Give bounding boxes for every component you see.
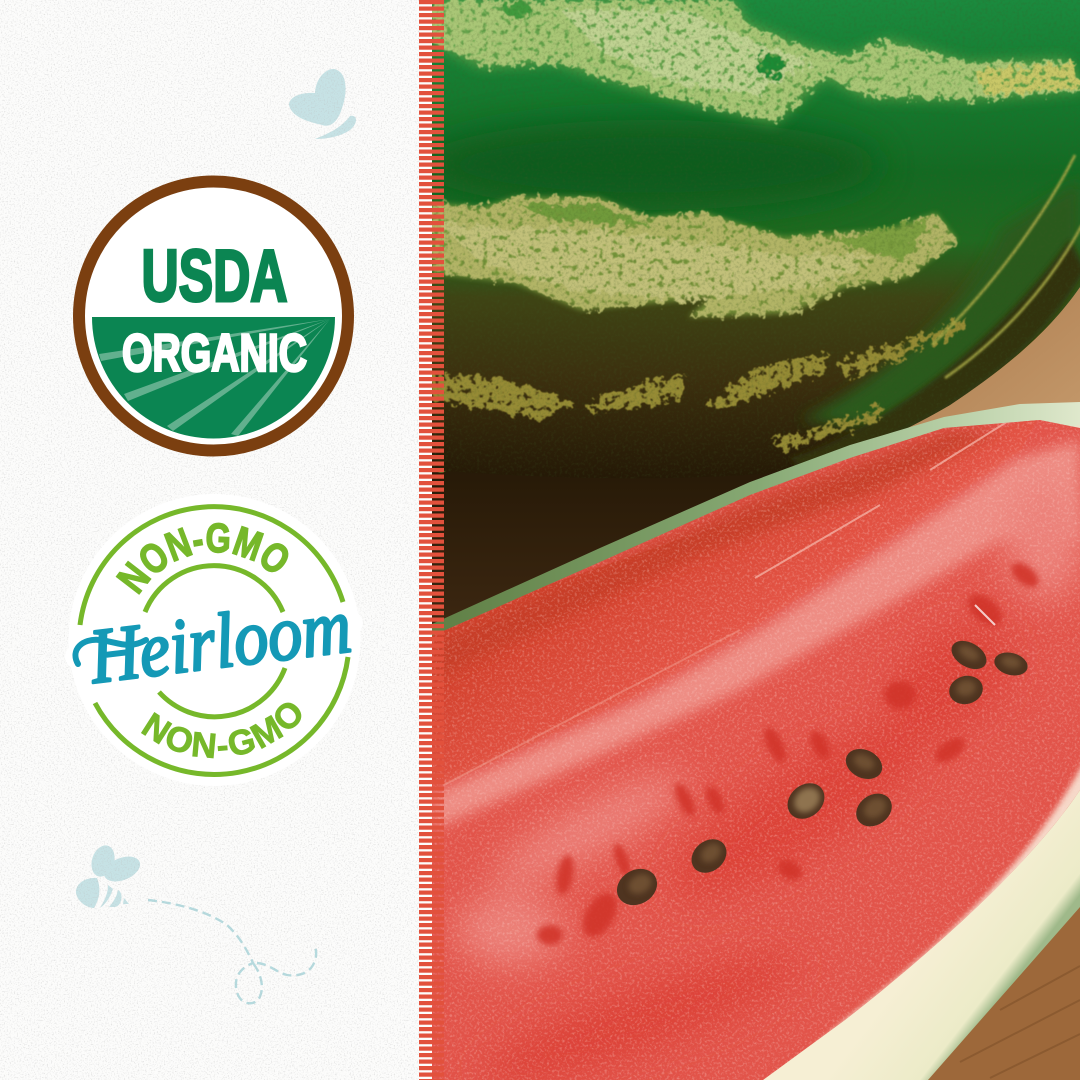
badge text: bottom NON-GMO: NON-GMO bbox=[141, 702, 302, 758]
badge script word: Heirloom: Heirloom bbox=[84, 581, 356, 700]
slice seeds bbox=[610, 635, 1030, 912]
badge text: top NON-GMO: NON-GMO bbox=[116, 522, 288, 595]
bee flight path bbox=[148, 900, 316, 1003]
icon: bee bbox=[76, 842, 316, 1003]
panel: Non-GMO heirloom badge bbox=[66, 494, 363, 786]
melon dark shade band bbox=[420, 120, 880, 210]
badge text paths bbox=[138, 552, 316, 758]
panel: fabric background bbox=[0, 0, 432, 1080]
melon upper light stripe bbox=[432, 0, 1080, 123]
melon edge shade bbox=[790, 240, 1080, 468]
flesh deep red zone bbox=[489, 619, 1014, 1080]
flesh seed pits bbox=[537, 558, 1043, 945]
flesh pink patches bbox=[455, 480, 1080, 965]
flesh speckle bbox=[432, 400, 1080, 1080]
melon middle stripe underlay bbox=[432, 197, 957, 317]
seed highlights bbox=[625, 642, 1022, 898]
seal text: ORGANIC: ORGANIC bbox=[122, 324, 307, 383]
seed bodies bbox=[610, 635, 1030, 912]
badge white backing bbox=[60, 494, 368, 786]
red stripe divider bbox=[419, 0, 444, 1080]
seal text: USDA: USDA bbox=[142, 236, 288, 317]
badge rings bbox=[80, 507, 348, 775]
small green stem edge bbox=[438, 470, 446, 473]
dark shadow under melon bbox=[432, 470, 780, 624]
melon rim lines bbox=[932, 155, 1080, 378]
melon upper stripe underlay bbox=[432, 0, 1080, 123]
script swash on H bbox=[75, 640, 146, 664]
wood table bbox=[908, 287, 1080, 1080]
whole watermelon bbox=[420, 0, 1080, 480]
slice top rind bbox=[432, 402, 1080, 640]
watermelon slice bbox=[432, 400, 1080, 1080]
slice flesh bbox=[432, 400, 1080, 1080]
melon right green shoulder bbox=[800, 180, 1080, 430]
melon lower yellow stripes bbox=[432, 315, 969, 450]
melon skin grain bbox=[432, 0, 1080, 480]
seal ring bbox=[79, 182, 348, 450]
panel: watermelon photo bbox=[420, 0, 1080, 1080]
fabric weave texture bbox=[0, 0, 419, 1080]
melon middle light stripe bbox=[432, 197, 957, 317]
flesh highlight streaks bbox=[444, 420, 1010, 785]
panel: USDA organic seal bbox=[79, 182, 348, 450]
seal rays bbox=[99, 319, 330, 436]
slice lower rind bbox=[763, 790, 1080, 1080]
flesh cut face dark rim bbox=[432, 430, 1000, 680]
flesh pale band along ridge bbox=[432, 440, 1080, 830]
icon: butterfly bbox=[289, 69, 356, 139]
seal green field bbox=[92, 317, 335, 438]
flesh upper cut face bbox=[432, 415, 1040, 790]
slice tip pale rind bbox=[1075, 426, 1080, 428]
flesh pale edge by rind bbox=[809, 760, 1080, 1046]
